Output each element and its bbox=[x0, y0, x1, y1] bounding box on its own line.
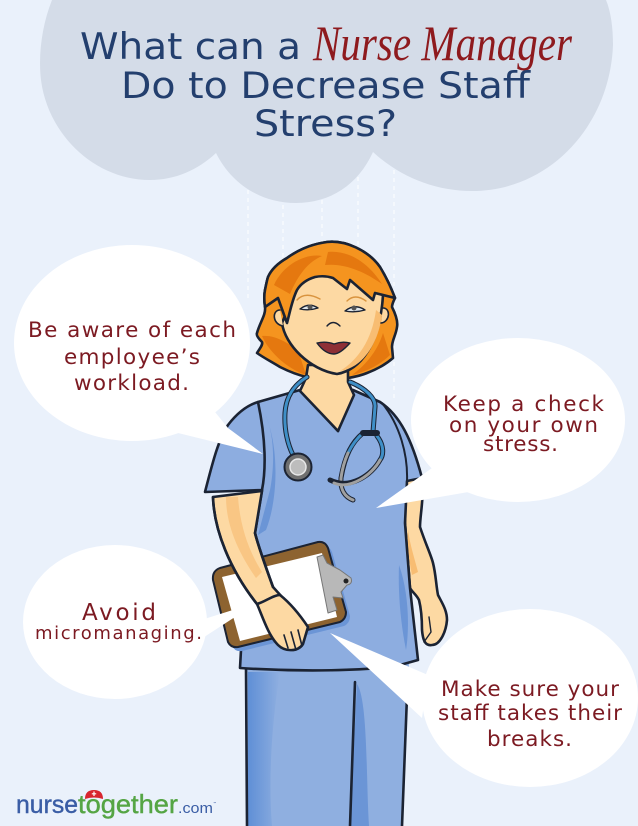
speech bubble: breaks bbox=[330, 609, 638, 787]
text: micromanaging bbox=[35, 600, 202, 644]
logo: nursetogether.com: .com bbox=[178, 800, 213, 817]
title line 1: What can a bbox=[80, 25, 301, 68]
text: workload: employee’s bbox=[64, 345, 200, 370]
text: own stress: on your own bbox=[449, 413, 598, 438]
left arm bbox=[213, 491, 282, 604]
clipboard bbox=[213, 542, 352, 651]
text: workload: Be aware of each bbox=[28, 318, 236, 343]
title emphasis: Nurse Manager: Nurse Manager bbox=[312, 15, 572, 71]
hair back bbox=[257, 242, 397, 378]
hand bbox=[257, 595, 308, 650]
logo: nursetogether.com bbox=[16, 789, 217, 819]
text: breaks: breaks. bbox=[487, 727, 572, 752]
text: own stress: stress. bbox=[483, 432, 558, 457]
eyes bbox=[297, 295, 366, 326]
title line 3: Stress? bbox=[254, 102, 397, 145]
speech bubble: own stress bbox=[376, 338, 625, 508]
speech tail: micromanaging bbox=[198, 602, 258, 641]
stethoscope bbox=[285, 377, 383, 500]
text: breaks bbox=[438, 677, 622, 752]
text: own stress: Keep a check bbox=[443, 392, 605, 417]
ears bbox=[274, 310, 283, 326]
logo: nursetogether.com: together bbox=[78, 789, 178, 819]
text: micromanaging: micromanaging. bbox=[35, 623, 202, 644]
nurse figure bbox=[198, 242, 447, 826]
mouth bbox=[317, 342, 350, 354]
logo: nursetogether.com: nurse bbox=[16, 791, 78, 819]
face bbox=[282, 270, 383, 374]
neck bbox=[300, 365, 354, 431]
logo nurse cap bbox=[85, 790, 103, 799]
title bbox=[80, 15, 572, 145]
cloud bbox=[40, 0, 613, 203]
text: own stress bbox=[443, 392, 605, 457]
text: micromanaging: Avoid bbox=[82, 600, 156, 626]
text: workload bbox=[28, 318, 236, 396]
stethoscope chestpiece bbox=[284, 454, 312, 480]
right arm bbox=[405, 478, 447, 645]
pants bbox=[246, 660, 409, 826]
logo: nursetogether.com: ™ bbox=[213, 801, 217, 806]
text: breaks: Make sure your bbox=[441, 677, 619, 702]
text: workload: workload. bbox=[74, 371, 189, 396]
text: breaks: staff takes their bbox=[438, 701, 622, 726]
title line 2: Do to Decrease Staff bbox=[121, 64, 531, 107]
hair fringe bbox=[264, 242, 395, 323]
speech bubble: workload bbox=[14, 245, 263, 454]
shirt bbox=[205, 390, 422, 670]
clipboard clip bbox=[317, 555, 352, 613]
speech bubble: micromanaging bbox=[23, 545, 207, 699]
